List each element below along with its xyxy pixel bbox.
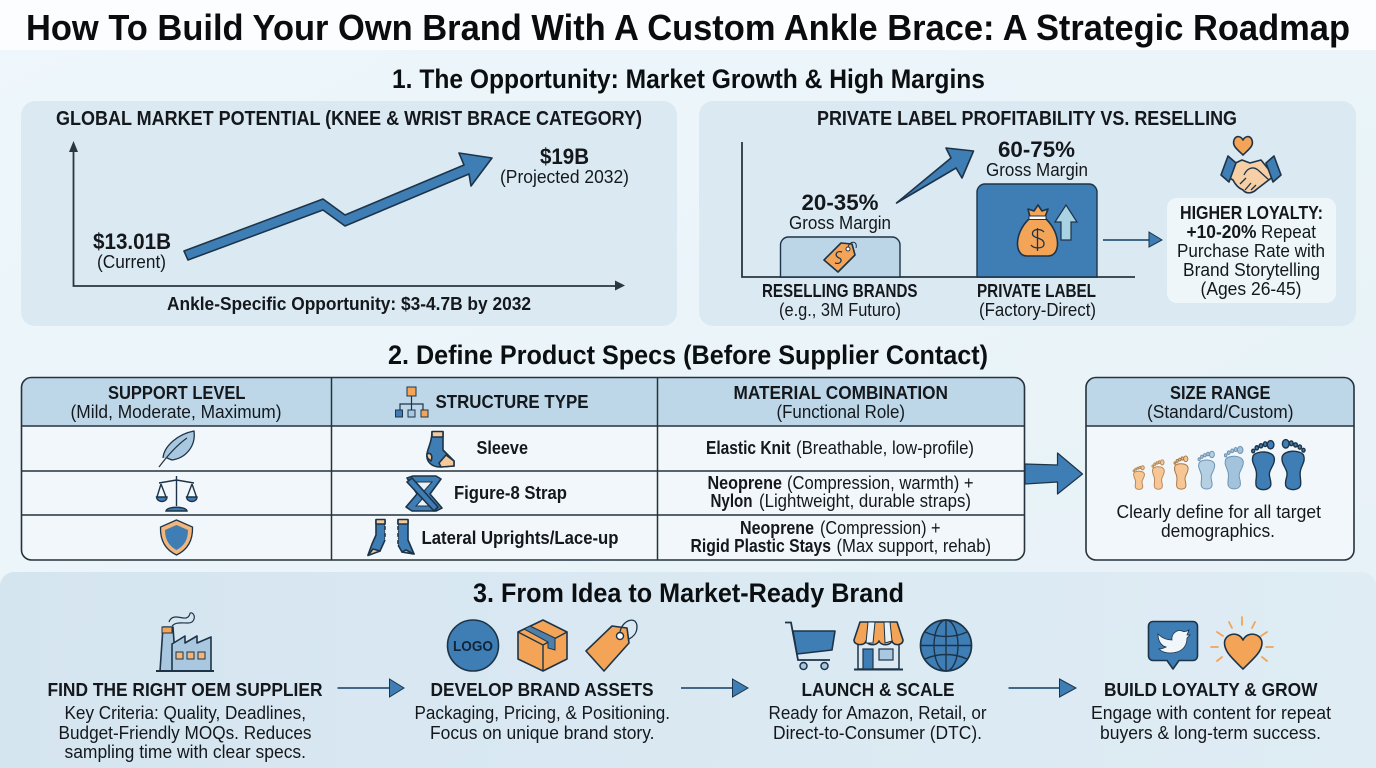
row 1 structure label: Sleeve xyxy=(476,438,528,458)
step text: buyers & long-term success. xyxy=(1100,723,1321,743)
column header: structure type: STRUCTURE TYPE xyxy=(436,392,588,412)
callout: higher loyalty: +10-20% xyxy=(1186,222,1256,242)
value: current: $13.01B xyxy=(93,229,171,254)
row 2 material xyxy=(708,473,974,511)
icon: up arrow xyxy=(1055,205,1077,240)
callout: higher loyalty: Brand Storytelling xyxy=(1183,260,1320,280)
value: current xyxy=(93,229,171,272)
step 3: launch and scale xyxy=(768,620,987,743)
row 2 support icon: scales xyxy=(156,476,197,511)
row 1 material: Elastic Knit xyxy=(706,438,790,458)
step text xyxy=(1091,703,1331,743)
callout: higher loyalty: (Ages 26-45) xyxy=(1200,279,1302,299)
row 1 support icon: feather xyxy=(159,431,194,467)
step text xyxy=(414,703,670,743)
chart axes xyxy=(69,141,625,290)
arrow: step 3 to 4 xyxy=(1008,679,1076,697)
icon: logo badge xyxy=(448,620,498,671)
step text: Ready for Amazon, Retail, or xyxy=(768,703,987,723)
label: private label: PRIVATE LABEL xyxy=(977,281,1096,301)
icon: price tag xyxy=(586,620,637,671)
column header: support level: SUPPORT LEVEL xyxy=(108,383,246,403)
value: projected xyxy=(500,144,629,187)
row 3 structure icon: lace-up brace xyxy=(368,520,414,556)
row 2 structure icon: figure-8 strap xyxy=(406,476,442,511)
step text: Key Criteria: Quality, Deadlines, xyxy=(64,703,306,723)
step text: Focus on unique brand story. xyxy=(430,723,654,743)
step text xyxy=(768,703,987,743)
size note: Clearly define for all target xyxy=(1116,502,1321,522)
step heading: LAUNCH & SCALE xyxy=(802,680,954,700)
panel: section 3 xyxy=(0,572,1376,768)
arrow to loyalty xyxy=(1103,232,1162,247)
value: projected: $19B xyxy=(540,144,589,169)
label: reselling brands xyxy=(762,281,918,320)
icon: org chart xyxy=(396,387,428,417)
row 3 support icon: shield xyxy=(160,520,193,555)
value: reselling margin: Gross Margin xyxy=(789,213,891,233)
comparison arrow xyxy=(896,148,974,203)
row 3 structure label: Lateral Uprights/Lace-up xyxy=(422,528,618,548)
icon: handshake with heart xyxy=(1221,137,1281,193)
panel heading xyxy=(1147,383,1294,422)
row 3 material: Rigid Plastic Stays xyxy=(690,536,831,556)
value: reselling margin xyxy=(789,190,891,233)
arrow to size range xyxy=(1025,453,1082,494)
step 1: OEM supplier xyxy=(48,613,322,762)
panel: profitability comparison xyxy=(699,101,1356,326)
row 2 structure label: Figure-8 Strap xyxy=(454,483,567,503)
label: private label: (Factory-Direct) xyxy=(979,300,1096,320)
panel heading: (Standard/Custom) xyxy=(1147,402,1294,422)
icon: social bubble xyxy=(1148,622,1198,669)
value: projected: (Projected 2032) xyxy=(500,167,629,187)
panel heading: GLOBAL MARKET POTENTIAL (KNEE & WRIST BRACE CATEGORY) xyxy=(56,108,642,130)
heading: section 1: 1. The Opportunity: Market Growth & High Margins xyxy=(392,64,985,94)
icon: heart with rays xyxy=(1211,617,1273,669)
row 3 material xyxy=(690,518,991,556)
chart axes xyxy=(742,142,1135,277)
panel: size range xyxy=(1086,378,1354,560)
step text: Engage with content for repeat xyxy=(1091,703,1331,723)
icon: price tag xyxy=(824,242,856,272)
heading: section 3: 3. From Idea to Market-Ready Brand xyxy=(473,578,904,608)
value: private label margin xyxy=(986,137,1088,180)
size note xyxy=(1116,502,1321,541)
label: private label xyxy=(977,281,1096,320)
value: private label margin: Gross Margin xyxy=(986,160,1088,180)
value: current: (Current) xyxy=(97,252,166,272)
heading: section 2: 2. Define Product Specs (Before Supplier Contact) xyxy=(388,340,988,370)
value: private label margin: 60-75% xyxy=(998,137,1075,162)
step text xyxy=(58,703,312,762)
spec table xyxy=(22,378,1024,560)
panel: global market potential xyxy=(21,101,677,326)
row 3 material: Neoprene xyxy=(740,518,814,538)
icon: shopping cart xyxy=(785,622,835,670)
callout: higher loyalty: Purchase Rate with xyxy=(1177,241,1325,261)
row 2 material: (Compression, warmth) + xyxy=(787,473,974,493)
step heading: FIND THE RIGHT OEM SUPPLIER xyxy=(48,680,322,700)
row 1 material: (Breathable, low-profile) xyxy=(796,438,974,458)
title: How To Build Your Own Brand With A Custom Ankle Brace: A Strategic Roadmap xyxy=(26,7,1350,48)
label: reselling brands: (e.g., 3M Futuro) xyxy=(779,300,901,320)
row 3 material: (Compression) + xyxy=(820,518,940,538)
column header: support level xyxy=(70,383,282,422)
icon: storefront xyxy=(854,622,903,670)
callout: higher loyalty xyxy=(1167,198,1336,303)
icon: globe xyxy=(920,620,972,671)
panel heading: SIZE RANGE xyxy=(1170,383,1270,403)
step 4: build loyalty xyxy=(1091,617,1331,743)
step text: Budget-Friendly MOQs. Reduces xyxy=(58,723,312,743)
icon: box xyxy=(518,620,567,671)
step text: Direct-to-Consumer (DTC). xyxy=(773,723,982,743)
column header: structure type xyxy=(396,387,588,417)
size note: demographics. xyxy=(1161,521,1275,541)
ankle opportunity note: Ankle-Specific Opportunity: $3-4.7B by 2032 xyxy=(167,294,531,314)
icon: footprints in increasing sizes xyxy=(1133,440,1305,490)
icon: money bag xyxy=(1017,205,1058,256)
callout: higher loyalty: HIGHER LOYALTY: xyxy=(1180,203,1323,223)
arrow: step 1 to 2 xyxy=(338,679,404,697)
label: reselling brands: RESELLING BRANDS xyxy=(762,281,918,301)
bar: reselling xyxy=(780,237,900,277)
row 2 material: Neoprene xyxy=(708,473,782,493)
column header: support level: (Mild, Moderate, Maximum) xyxy=(70,402,282,422)
step text: sampling time with clear specs. xyxy=(64,742,306,762)
row 3 material: (Max support, rehab) xyxy=(836,536,991,556)
icon: factory xyxy=(156,613,214,671)
row 2 material: (Lightweight, durable straps) xyxy=(759,491,971,511)
column header: material combination xyxy=(734,383,948,422)
step heading: BUILD LOYALTY & GROW xyxy=(1104,680,1318,700)
column header: material combination: (Functional Role) xyxy=(776,402,905,422)
callout: higher loyalty: Repeat xyxy=(1261,222,1316,242)
value: reselling margin: 20-35% xyxy=(802,190,878,215)
bar: private label xyxy=(977,184,1097,277)
row 2 material: Nylon xyxy=(710,491,752,511)
growth arrow xyxy=(184,153,492,260)
icon: logo badge: LOGO xyxy=(453,638,493,655)
arrow: step 2 to 3 xyxy=(681,679,748,697)
row 1 structure icon: sleeve xyxy=(427,432,454,467)
step 2: brand assets xyxy=(414,620,670,743)
panel heading: PRIVATE LABEL PROFITABILITY VS. RESELLING xyxy=(817,108,1237,130)
column header: material combination: MATERIAL COMBINATION xyxy=(734,383,948,403)
step heading: DEVELOP BRAND ASSETS xyxy=(430,680,654,700)
step text: Packaging, Pricing, & Positioning. xyxy=(414,703,670,723)
row 1 material xyxy=(706,438,974,458)
